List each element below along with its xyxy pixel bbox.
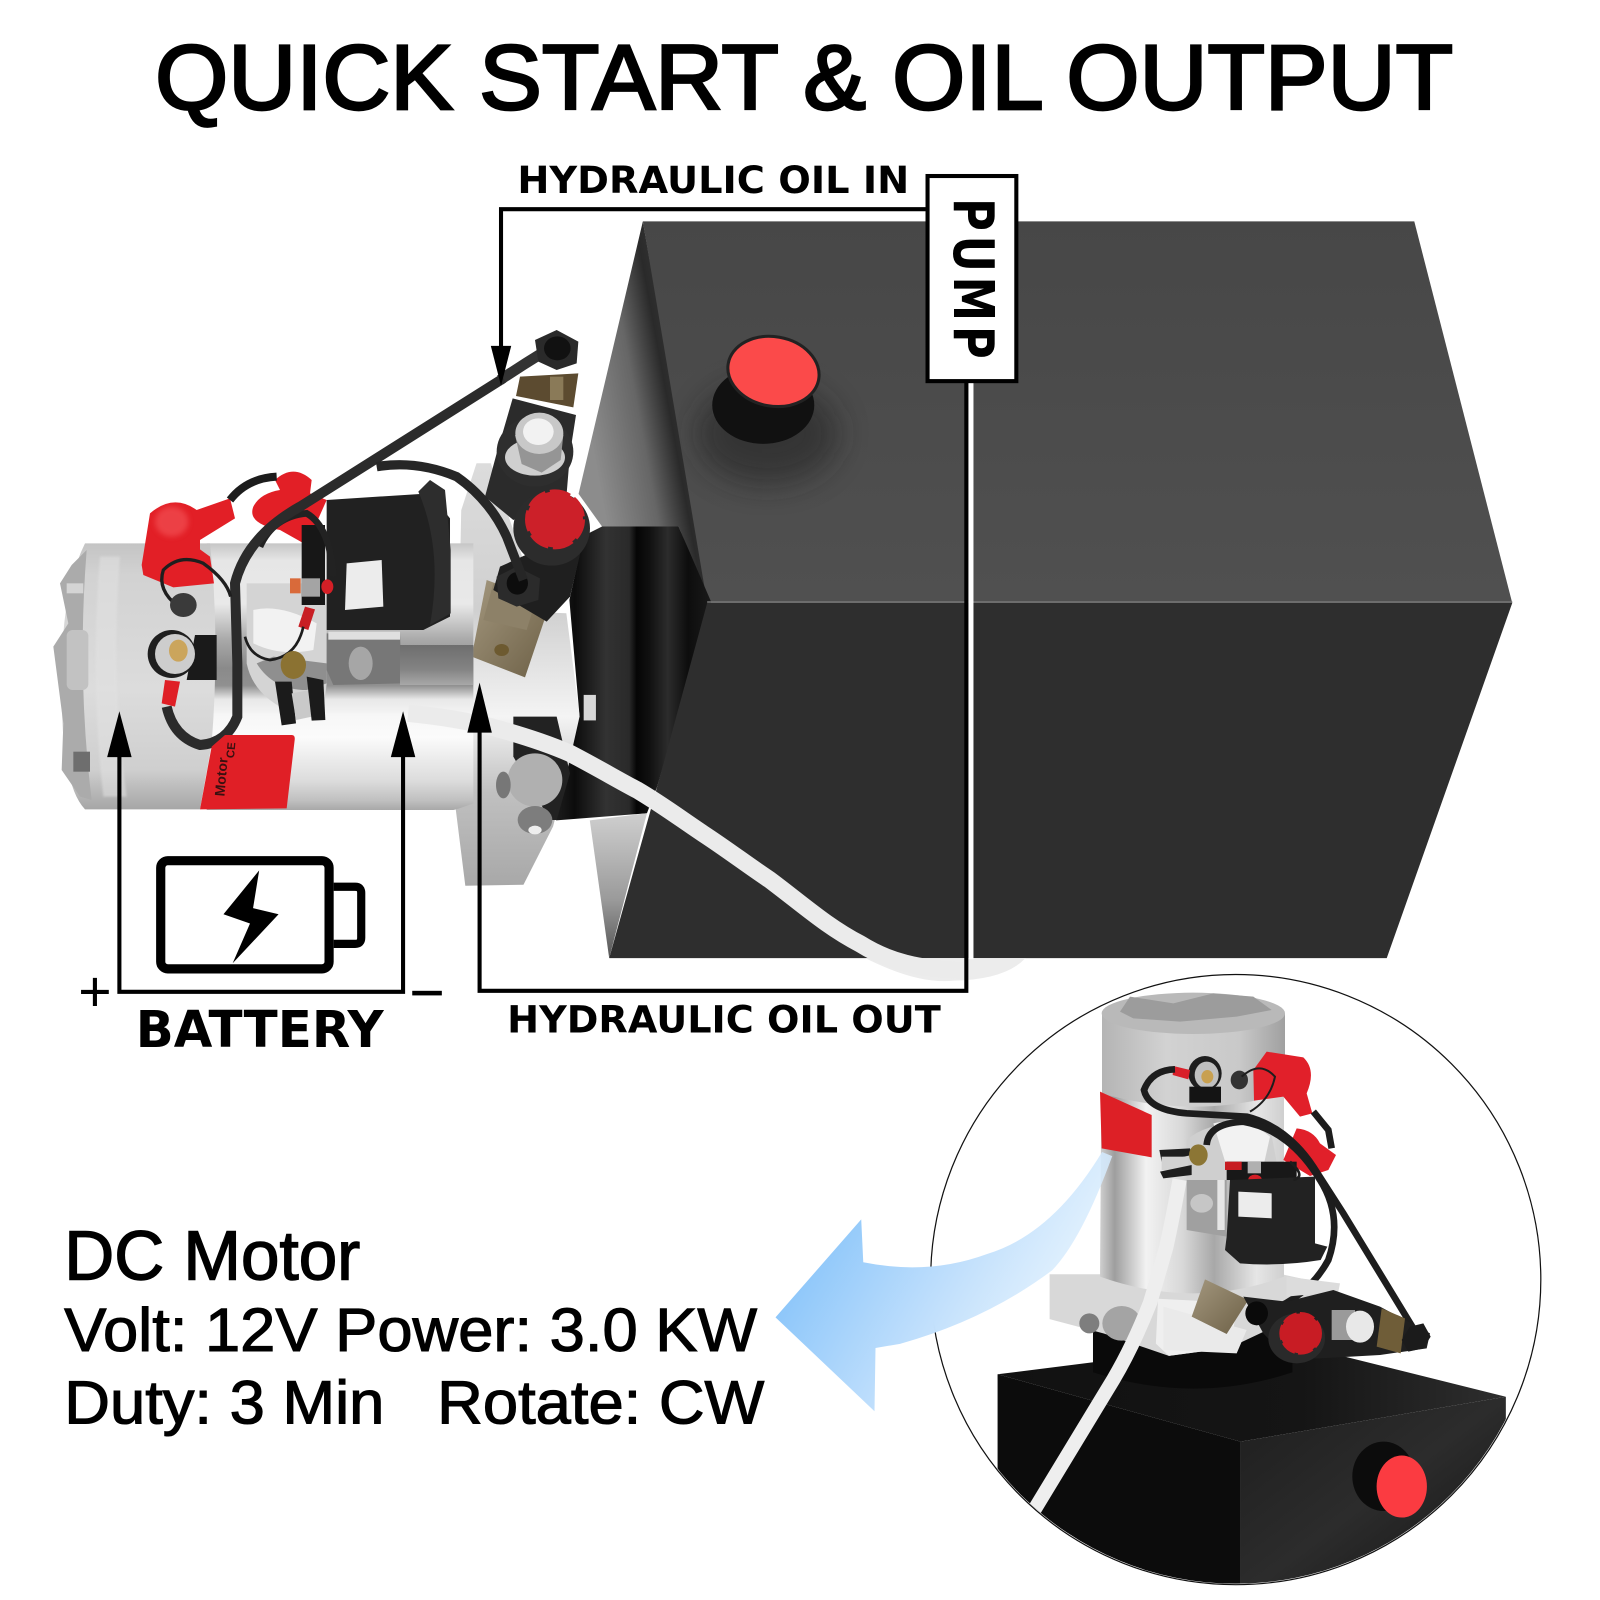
orange nut (290, 578, 301, 593)
inset mounting plate (1050, 1274, 1338, 1356)
inset recess bright (1214, 1122, 1270, 1162)
spec line: volt and power: Volt: 12V Power: 3.0 KW (64, 1296, 757, 1364)
inset red label (1100, 1092, 1152, 1157)
plate bolt (584, 695, 596, 720)
red crimp lug (162, 680, 180, 707)
inset photo (998, 993, 1506, 1597)
knob base (513, 491, 590, 566)
inset terminal post (1188, 1056, 1222, 1103)
small jumper wire (162, 560, 231, 607)
red ring (321, 579, 333, 594)
solenoid body (327, 480, 451, 630)
fitting ball (508, 753, 562, 807)
inset valve block (1243, 1290, 1430, 1358)
brass fitting (516, 373, 578, 407)
inset return fitting (1079, 1306, 1141, 1341)
oil out connector line (467, 382, 973, 991)
solenoid bracket (327, 633, 402, 685)
tank top face (643, 221, 1512, 603)
inset circle outline (931, 974, 1541, 1585)
white return hose (408, 713, 1026, 981)
terminal post (148, 630, 217, 680)
pump text: PUMP (941, 198, 1006, 359)
red motor label (200, 735, 295, 809)
return line fitting (496, 717, 570, 834)
inset knob base (1268, 1313, 1325, 1363)
arrow: oil in (491, 346, 511, 386)
fitting hole (528, 826, 542, 834)
boot highlight (155, 507, 188, 537)
inset flange (1093, 1327, 1292, 1389)
battery wiring (107, 711, 415, 992)
inset red ring (1248, 1174, 1262, 1180)
inset brass terminal (1189, 1144, 1208, 1166)
label: hydraulic oil in: HYDRAULIC OIL IN (517, 158, 909, 202)
inset lower tank (998, 1274, 1506, 1597)
fitting left nut (496, 772, 511, 798)
lower block (493, 533, 585, 622)
label: battery: BATTERY (136, 1001, 385, 1060)
hose (408, 713, 963, 970)
spec line: duty and rotation: Duty: 3 Min Rotate: CW (64, 1368, 765, 1436)
red terminal boots (142, 472, 327, 587)
fitting highlight (550, 377, 563, 400)
lower plug hole (507, 572, 528, 595)
bracket bolt (349, 647, 373, 680)
brass terminal (281, 651, 306, 679)
main wire harness (167, 378, 503, 745)
upper valve block (485, 330, 590, 622)
terminal wire (230, 477, 277, 500)
oil in connector line (491, 209, 926, 386)
bolt ring (505, 439, 565, 476)
inset brass fitting (1377, 1308, 1405, 1353)
inset bracket bolt (1190, 1194, 1213, 1213)
fitting shadow block (513, 717, 570, 820)
tank filler cap (712, 329, 825, 444)
inset upper motor (1102, 1013, 1285, 1107)
inset tank top (998, 1354, 1506, 1442)
pipe bright patch (253, 608, 317, 652)
blue callout arrow (776, 1152, 1112, 1411)
inset nut (1248, 1162, 1261, 1173)
pipe dark patch (257, 657, 327, 690)
tank left side strip (579, 221, 710, 603)
inset hose clamp (1159, 1148, 1192, 1178)
inset plate lower block (1199, 1326, 1246, 1354)
inset plate block (1156, 1299, 1238, 1356)
bolt highlight (523, 418, 554, 445)
inset button collar (1352, 1442, 1415, 1511)
chrome upper section (207, 543, 473, 717)
inset circle: vertical view of unit (931, 974, 1541, 1597)
inset chrome recess (1194, 1126, 1274, 1180)
hose shadow blob (865, 958, 1026, 981)
thin jumper wire (245, 627, 303, 660)
inset white hose (1035, 1180, 1180, 1509)
tank edge highlight (707, 601, 1512, 603)
mounting plate (455, 463, 580, 886)
solenoid terminal block (302, 525, 325, 605)
red cap (722, 329, 825, 414)
motor end shell (62, 543, 215, 809)
inset tank left face (998, 1374, 1240, 1597)
arrow: negative (391, 711, 415, 757)
red motor label: Motor (211, 756, 231, 797)
coil ribbed stem (483, 583, 540, 630)
hydraulic tank (556, 221, 1512, 958)
battery icon (161, 861, 361, 969)
inset solenoid label (1238, 1192, 1272, 1218)
block tube (485, 398, 576, 520)
inset plug (1402, 1323, 1431, 1352)
inset motor assembly (1079, 993, 1431, 1363)
inset valve plug (1245, 1301, 1268, 1325)
end cover (53, 550, 92, 800)
inset solenoid terminals (1227, 1162, 1297, 1180)
inset lower motor (1100, 1093, 1284, 1293)
lightning bolt (223, 870, 279, 963)
grommet (170, 593, 197, 617)
solenoid hose end (500, 353, 542, 380)
fitting hex (518, 806, 552, 834)
spec heading: DC Motor (64, 1217, 360, 1295)
arrow: oil out (467, 683, 492, 733)
inset red crimp (1173, 1066, 1190, 1079)
inset brass valve (1192, 1279, 1248, 1334)
minus sign (412, 991, 442, 995)
inset bracket (1187, 1180, 1227, 1237)
red motor label: CE (225, 741, 238, 759)
shell bright face (96, 557, 127, 797)
lower solenoid coil (472, 580, 550, 677)
plus sign: + (78, 960, 112, 1024)
label: hydraulic oil out: HYDRAULIC OIL OUT (507, 998, 941, 1042)
arrow: positive (107, 711, 132, 757)
hex bolt (515, 435, 563, 473)
motor specifications (64, 1217, 765, 1436)
inset end cover (1120, 993, 1272, 1022)
black flange (556, 527, 711, 820)
red knob (527, 491, 583, 547)
inset grommet (1231, 1071, 1248, 1089)
inset bracket edge (1217, 1180, 1225, 1230)
inset solenoid (1225, 1177, 1327, 1264)
inset tank right face (1240, 1397, 1506, 1597)
solenoid plug (535, 330, 578, 370)
lower chrome pipe (400, 645, 473, 685)
red crimp (298, 607, 315, 630)
cap collar (712, 366, 814, 444)
inset wires (1144, 1068, 1413, 1328)
inset plate right edge (1290, 1278, 1340, 1296)
lower motor body (207, 713, 473, 810)
bolt head (515, 413, 563, 454)
coil housing (472, 580, 550, 677)
plug hole (544, 336, 571, 360)
pump label box (928, 176, 1016, 381)
tank foot wedge (590, 813, 647, 958)
inset red knob (1281, 1313, 1321, 1353)
title: QUICK START & OIL OUTPUT (155, 27, 1453, 129)
inset motor top cap (1102, 993, 1285, 1034)
bracket highlight (328, 632, 400, 640)
dc motor (53, 378, 523, 810)
bolt washer (497, 417, 573, 487)
hose clamp (275, 677, 325, 725)
inset red button (1377, 1456, 1427, 1518)
inset red boots (1253, 1052, 1336, 1176)
inner solenoid wire (260, 513, 333, 577)
inset chrome bolt (1332, 1310, 1374, 1343)
arched wire to valve (377, 465, 523, 580)
coil screw (494, 644, 509, 656)
solenoid rating label (345, 560, 383, 610)
lower plug (497, 567, 540, 607)
pipe chrome shading (247, 583, 327, 713)
tank front face (609, 603, 1512, 958)
terminal nut (302, 578, 320, 597)
inset red lugs (1225, 1162, 1242, 1170)
shadow around cap (696, 383, 839, 485)
